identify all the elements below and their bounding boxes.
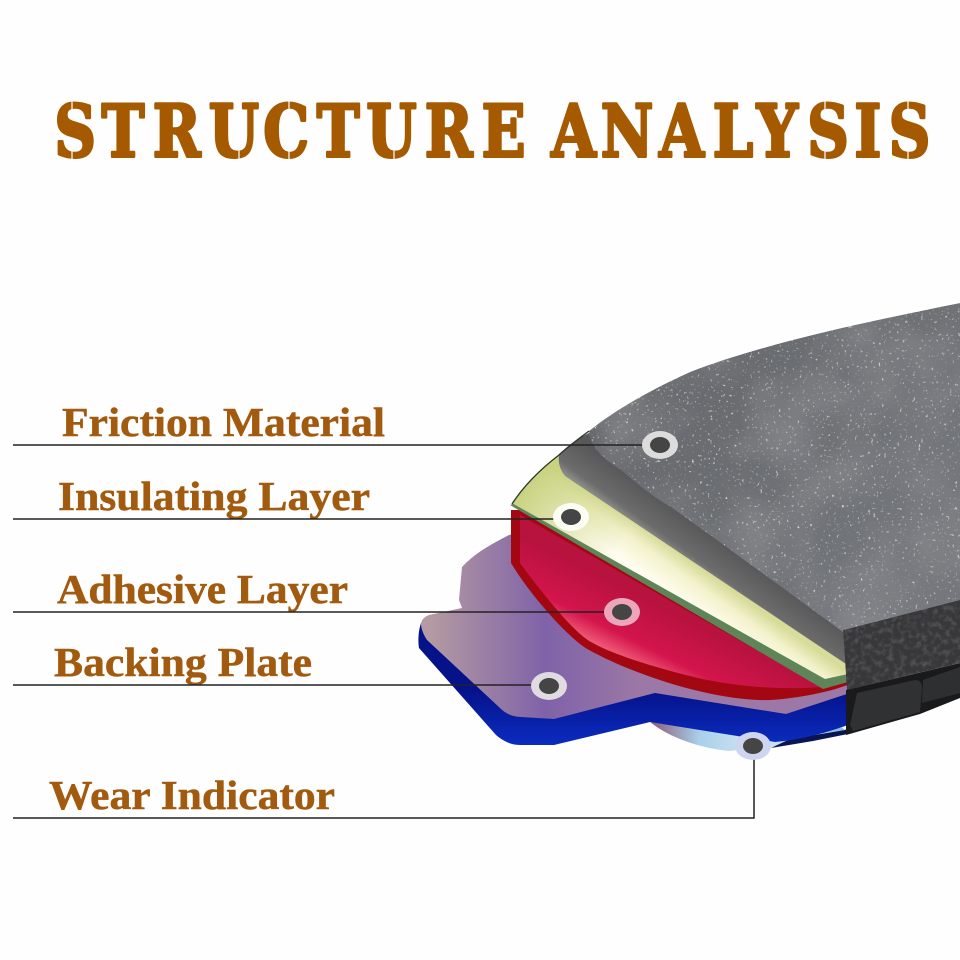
title: STRUCTURE ANALYSIS bbox=[0, 90, 930, 174]
label: backing plate bbox=[13, 639, 567, 700]
label: wear indicator: Wear Indicator bbox=[49, 772, 335, 818]
label: insulating layer bbox=[13, 473, 589, 531]
backing plate bbox=[418, 520, 859, 745]
label: insulating layer: Insulating Layer bbox=[58, 473, 370, 519]
brake pad diagram bbox=[418, 303, 960, 751]
purple plate top bbox=[421, 520, 859, 719]
label: friction material bbox=[13, 399, 678, 459]
blue plate edge bbox=[418, 623, 859, 745]
chamfer bbox=[559, 433, 850, 664]
wear indicator bbox=[650, 722, 853, 751]
label: adhesive layer bbox=[13, 566, 640, 626]
label: adhesive layer: Adhesive Layer bbox=[57, 566, 348, 612]
label: friction material: Friction Material bbox=[62, 399, 385, 445]
insulating layer bbox=[510, 455, 850, 689]
friction material bbox=[559, 303, 960, 735]
black clip bbox=[850, 680, 922, 731]
rear strip bbox=[922, 667, 960, 703]
dark underlay bbox=[846, 663, 960, 735]
green edge bbox=[510, 503, 848, 689]
textured top surface bbox=[589, 303, 960, 632]
adhesive layer bbox=[511, 510, 850, 700]
front block bbox=[843, 600, 960, 690]
edge line along the left arc bbox=[512, 431, 589, 504]
label: backing plate: Backing Plate bbox=[54, 639, 312, 685]
label: wear indicator bbox=[13, 732, 771, 818]
